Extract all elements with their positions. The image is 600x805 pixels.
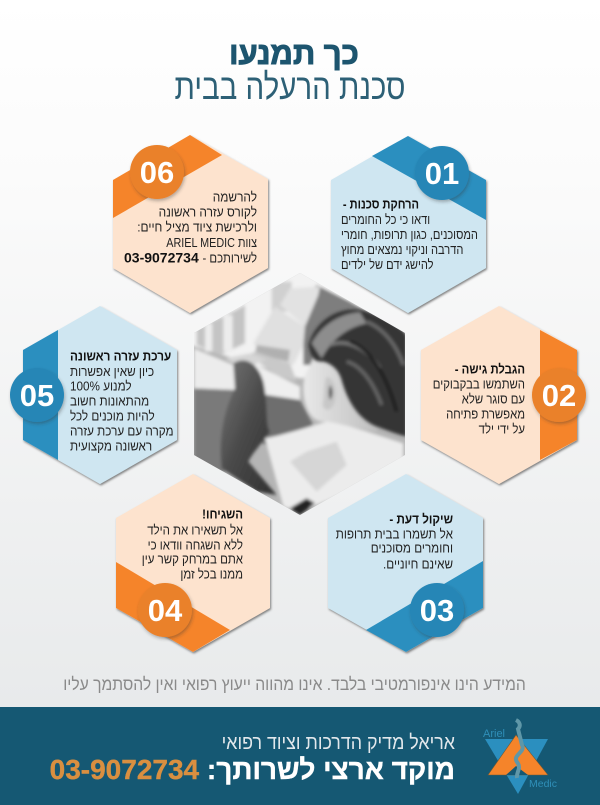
panel: 03 discretion: 03 [420,593,454,628]
logo: Ariel Medic: Medic [529,778,557,790]
panel: 06 first aid course: להרשמה [213,190,257,205]
panel: 06 first aid course: 03-9072734 [124,250,199,266]
title [175,36,405,107]
panel: 02 limit access: מאפשרת פתיחה [446,407,525,422]
disclaimer: המידע הינו אינפורמטיבי בלבד. אינו מהווה ייעוץ רפואי ואין להסתמך עליו [63,675,526,694]
footer hotline: מוקד ארצי לשרותך: 03-9072734 [50,754,455,785]
panel: 03 discretion: שיקול דעת - [389,512,453,527]
panel: 04 supervision: ללא השגחה וודאו כי [148,538,243,553]
panel: 05 first aid kit: ראשונה מקצועית [70,439,152,454]
panel: 06 first aid course: לקורס עזרה ראשונה [159,205,257,220]
panel: 02 limit access: עם סוגר שלא [462,392,525,407]
panel: 02 limit access: השתמשו בבקבוקים [433,377,525,392]
panel: 01 keep hazards away: הדרבה וניקוי נמצאים מחוץ [341,242,463,257]
panel: 05 first aid kit: 05 [20,378,54,413]
panel: 06 first aid course: 06 [140,155,174,190]
panel: 01 keep hazards away: המסוכנים, כגון תרופות, חומרי [341,227,478,242]
panel: 05 first aid kit: ערכת עזרה ראשונה [70,349,172,364]
panel: 05 first aid kit: מהתאונות חשוב [70,394,149,409]
panel: 06 first aid course: צוות ARIEL MEDIC [166,235,257,250]
panel: 02 limit access: על ידי ילד [479,422,525,437]
panel: 01 keep hazards away [331,136,486,313]
title: כך תמנעו [229,36,359,71]
panel: 03 discretion: אל תשמרו בבית תרופות [336,527,453,542]
panel: 05 first aid kit: מקרה עם ערכת עזרה [70,424,174,439]
panel: 03 discretion [328,474,483,652]
panel: 06 first aid course: ולרכישת ציוד מציל חיים: [137,220,257,235]
panel: 04 supervision: אתם במרחק קשר עין [142,552,243,567]
panel: 05 first aid kit [10,306,177,484]
panel: 04 supervision: אל תשאירו את הילד [147,523,243,538]
logo: Ariel Medic: Ariel [483,728,505,740]
panel: 05 first aid kit: כיון שאין אפשרות [70,364,154,379]
panel: 01 keep hazards away: 01 [425,156,459,191]
panel: 02 limit access: 02 [542,378,576,413]
footer tagline: אריאל מדיק הדרכות וציוד רפואי [222,732,455,754]
panel: 04 supervision: 04 [148,593,183,628]
panel: 04 supervision: השגיחו! [202,507,243,522]
footer bar [0,707,600,805]
panel: 06 first aid course [113,135,268,313]
panel: 04 supervision: ממנו בכל זמן [180,567,243,582]
panel: 06 first aid course: לשירותכם - [202,251,257,266]
photo: child drinking from bottle [190,265,410,520]
panel: 05 first aid kit: למנוע 100% [70,379,132,394]
panel: 01 keep hazards away: להישג ידם של ילדים [341,257,433,272]
panel: 03 discretion: שאינם חיוניים. [383,557,453,572]
panel: 01 keep hazards away: ודאו כי כל החומרים [341,212,430,227]
panel: 04 supervision [116,474,270,652]
logo: Ariel Medic [483,720,557,794]
panel: 05 first aid kit: להיות מוכנים לכל [70,409,155,424]
panel: 03 discretion: וחומרים מסוכנים [371,541,453,556]
panel: 01 keep hazards away: הרחקת סכנות - [343,197,419,212]
title: סכנת הרעלה בבית [175,66,405,107]
panel: 02 limit access: הגבלת גישה - [455,362,525,377]
panel: 02 limit access [421,306,586,484]
